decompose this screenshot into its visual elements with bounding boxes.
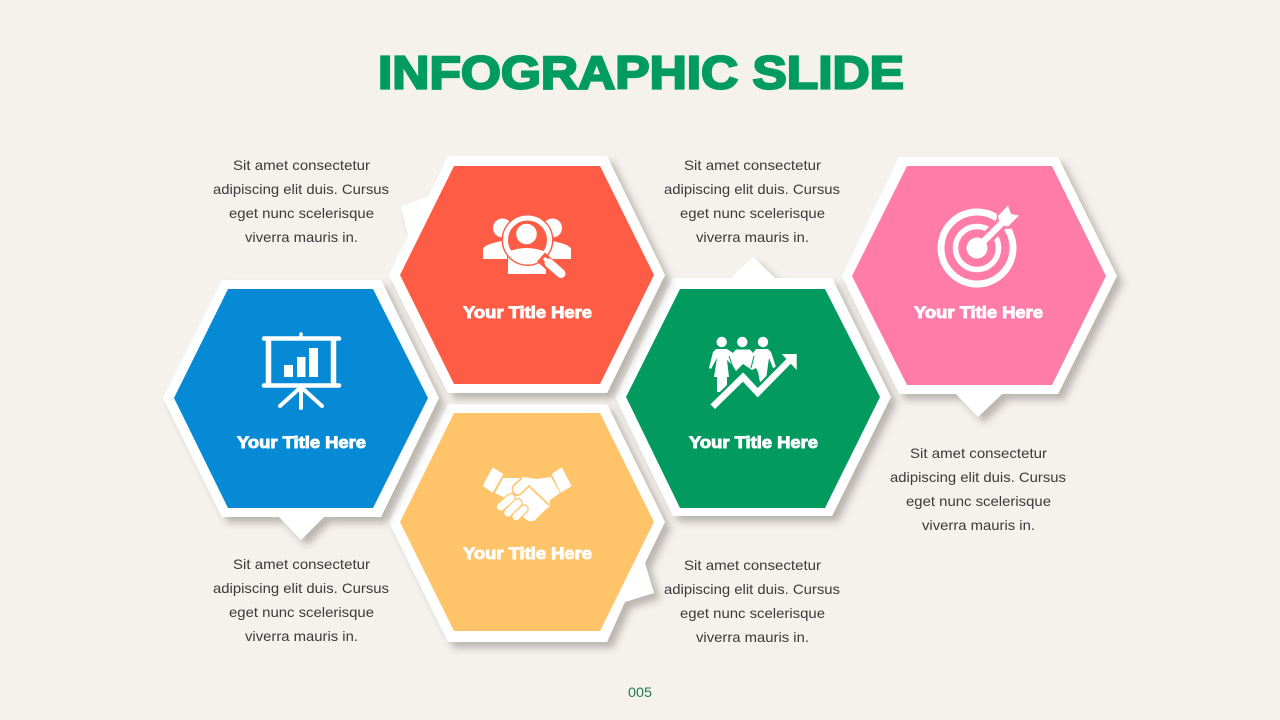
text block: bottom left: adipiscing elit duis. Cursus (213, 580, 389, 596)
text block: bottom middle: adipiscing elit duis. Cursus (664, 581, 840, 597)
panel: red hexagon (389, 156, 665, 393)
panel: blue hexagon (163, 280, 439, 540)
title: INFOGRAPHIC SLIDE (378, 46, 904, 98)
panel title: Your Title Here (463, 545, 592, 563)
text block: right (890, 445, 1066, 533)
text block: bottom left (213, 556, 389, 644)
panel title: Your Title Here (463, 304, 592, 322)
text block: top middle: eget nunc scelerisque (680, 205, 825, 221)
text block: bottom left: Sit amet consectetur (233, 556, 370, 572)
text block: top left: Sit amet consectetur (233, 157, 370, 173)
text block: bottom middle (664, 557, 840, 645)
text block: top middle: adipiscing elit duis. Cursus (664, 181, 840, 197)
panel title: Your Title Here (689, 434, 818, 452)
icon: handshake (483, 467, 572, 521)
text block: bottom middle: Sit amet consectetur (684, 557, 821, 573)
text block: top middle (664, 157, 840, 245)
text block: bottom left: viverra mauris in. (245, 628, 358, 644)
text block: bottom middle: viverra mauris in. (696, 629, 809, 645)
text block: top middle: viverra mauris in. (696, 229, 809, 245)
panel title: Your Title Here (914, 304, 1043, 322)
text block: top middle: Sit amet consectetur (684, 157, 821, 173)
text block: right: viverra mauris in. (922, 517, 1035, 533)
text block: top left: adipiscing elit duis. Cursus (213, 181, 389, 197)
text block: right: Sit amet consectetur (910, 445, 1047, 461)
text block: right: eget nunc scelerisque (906, 493, 1051, 509)
text block: top left: eget nunc scelerisque (229, 205, 374, 221)
icon: target with arrow (941, 203, 1020, 284)
text block: bottom middle: eget nunc scelerisque (680, 605, 825, 621)
panel title: Your Title Here (237, 434, 366, 452)
text block: bottom left: eget nunc scelerisque (229, 604, 374, 620)
page number: 005 (628, 685, 652, 700)
panel: green hexagon (615, 257, 891, 516)
text block: top left: viverra mauris in. (245, 229, 358, 245)
icon: people search magnifier (483, 214, 571, 274)
panel: yellow hexagon (389, 404, 665, 642)
panel: pink hexagon (842, 157, 1117, 417)
icon: presentation board with bars (264, 334, 339, 408)
text block: top left (213, 157, 389, 245)
text block: right: adipiscing elit duis. Cursus (890, 469, 1066, 485)
icon: people and growth arrow (709, 337, 797, 407)
